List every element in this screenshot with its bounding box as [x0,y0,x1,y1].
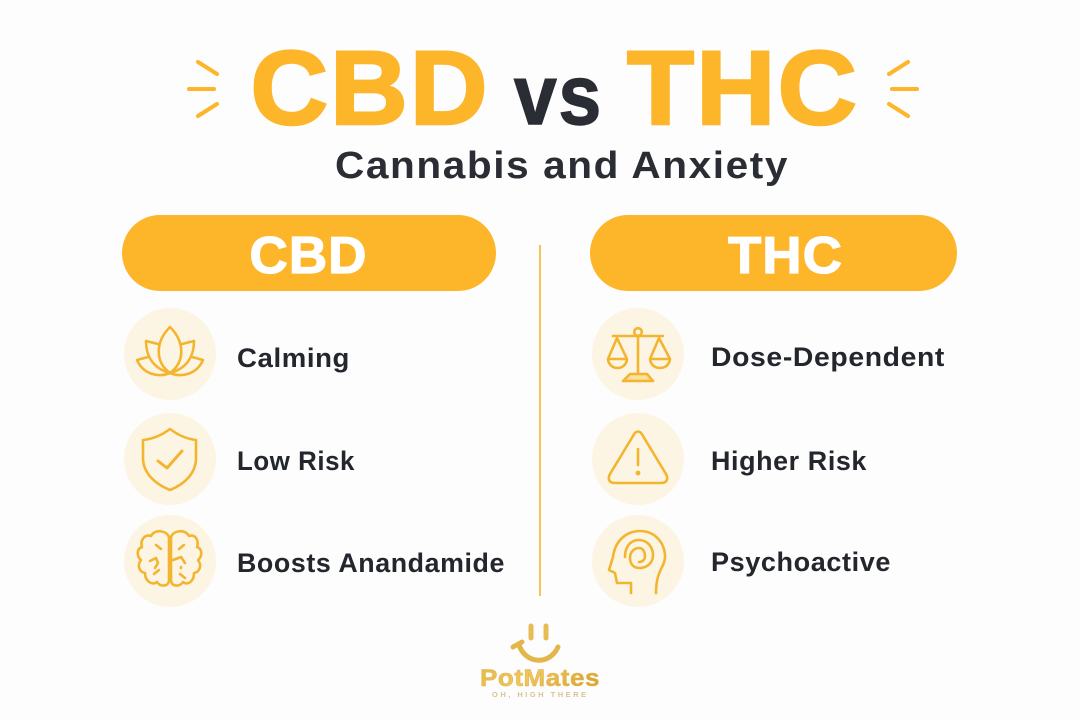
item: Higher Risk [592,413,867,505]
divider [539,245,541,596]
title [250,30,859,147]
item: Calming [124,308,350,400]
THC header pill [590,215,957,291]
icon: left sparkle lines [189,62,217,116]
item: Boosts Anandamide [124,515,505,607]
item: Low Risk [124,413,355,505]
item: Psychoactive: Psychoactive [711,547,891,577]
item: Psychoactive [592,515,891,607]
item: Calming: Calming [237,343,350,373]
subtitle: Cannabis and Anxiety [335,145,789,187]
panel: CBD column [122,215,505,607]
item: Dose-Dependent: Dose-Dependent [711,342,945,372]
icon: smiley [513,626,558,660]
title: CBD [250,30,490,147]
title: vs [514,48,603,142]
logo: PotMates [480,626,600,699]
panel: THC column [590,215,957,607]
item: Low Risk: Low Risk [237,446,355,476]
item: Higher Risk: Higher Risk [711,446,867,476]
logo: PotMates: OH, HIGH THERE [492,690,586,699]
CBD header pill [122,215,496,291]
item: Dose-Dependent [592,308,945,400]
icon: right sparkle lines [889,62,917,116]
item: Boosts Anandamide: Boosts Anandamide [237,548,505,578]
CBD header pill: CBD [250,227,368,285]
THC header pill: THC [728,227,843,285]
logo: PotMates: PotMates [480,665,600,692]
title: THC [627,30,859,147]
